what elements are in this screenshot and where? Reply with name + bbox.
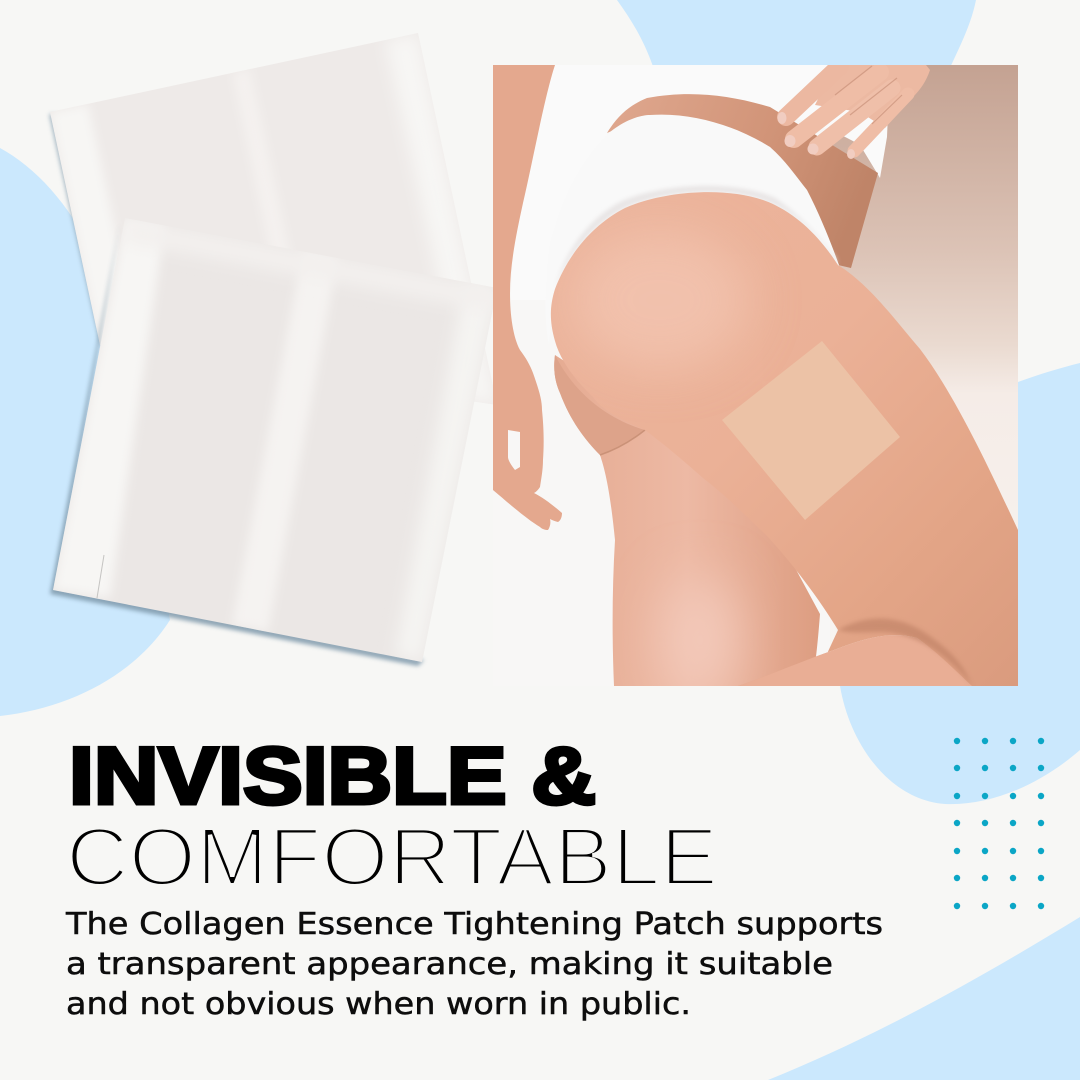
description text: The Collagen Essence Tightening Patch supports (65, 907, 883, 942)
fold line (600, 430, 645, 455)
photo backdrop (493, 65, 1018, 686)
beige wall (832, 65, 1018, 529)
crop top (830, 110, 888, 178)
title: COMFORTABLE: COMFORTABLE (66, 810, 718, 903)
underwear (610, 114, 840, 266)
fingernails (778, 112, 855, 159)
description text: a transparent appearance, making it suitable (66, 947, 833, 982)
knee crease shadow (840, 618, 968, 678)
description text: and not obvious when worn in public. (66, 987, 691, 1022)
back patch (49, 33, 497, 405)
description text (65, 907, 883, 1022)
main thigh (551, 192, 1018, 686)
left arm and hand (493, 65, 562, 530)
decorative dot grid (954, 738, 1044, 909)
back leg (554, 355, 820, 686)
right hand (778, 65, 930, 159)
waist skin (607, 94, 878, 268)
title: INVISIBLE &: INVISIBLE & (69, 732, 596, 822)
photo: woman with patch on thigh (493, 65, 1018, 705)
front patch (50, 218, 497, 666)
patch on thigh (722, 341, 900, 520)
